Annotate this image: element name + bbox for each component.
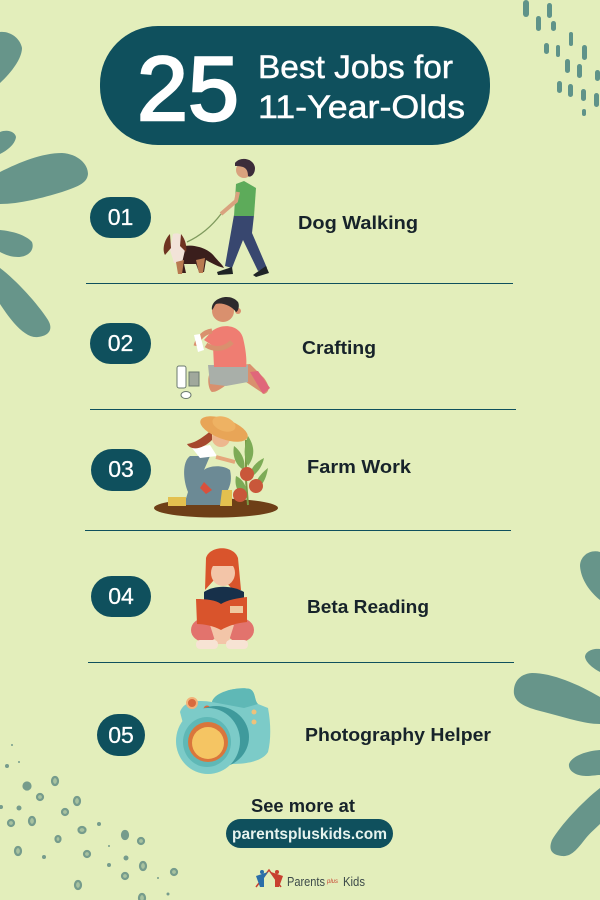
small dots: bottom left xyxy=(0,744,170,896)
icon: camera xyxy=(176,688,270,774)
title banner: 25 xyxy=(137,39,239,140)
item 03 xyxy=(91,411,412,518)
see more callout xyxy=(226,796,393,848)
number badge 05: 05 xyxy=(108,722,134,748)
website pill xyxy=(226,819,393,848)
number badge 03: 03 xyxy=(108,456,134,482)
dots: bottom left xyxy=(8,777,177,900)
label: Farm Work xyxy=(307,457,412,477)
label: Photography Helper xyxy=(305,725,491,745)
logo: Parents Plus Kids xyxy=(256,870,365,889)
item 04 xyxy=(91,548,429,649)
website pill: parentspluskids.com xyxy=(232,826,387,843)
leaves: top left xyxy=(0,32,88,337)
item 05 xyxy=(97,688,491,774)
leaves: bottom right xyxy=(514,551,600,856)
number badge 01 xyxy=(90,197,151,238)
number badge 04 xyxy=(91,576,151,617)
number badge 03 xyxy=(91,449,151,491)
item 02 xyxy=(90,297,376,398)
title banner: 11-Year-Olds xyxy=(258,89,465,125)
icon: girl reading xyxy=(191,548,254,649)
title banner xyxy=(100,26,490,145)
icon: child crafting xyxy=(177,297,270,398)
icon: farmer with plants xyxy=(154,411,278,518)
divider 3 xyxy=(85,530,511,532)
item 01 xyxy=(90,159,418,277)
dashes: top right xyxy=(523,0,600,116)
number badge 02 xyxy=(90,323,151,364)
see more callout: See more at xyxy=(251,796,355,816)
logo: Parents Plus Kids: Kids xyxy=(343,875,365,889)
divider 2 xyxy=(90,408,516,410)
number badge 05 xyxy=(97,714,145,756)
number badge 01: 01 xyxy=(108,204,133,230)
number badge 04: 04 xyxy=(108,583,134,609)
title banner: Best Jobs for xyxy=(258,49,453,85)
divider 4 xyxy=(88,662,514,664)
icon: boy walking dog xyxy=(164,159,269,277)
label: Dog Walking xyxy=(298,213,418,233)
number badge 02: 02 xyxy=(108,330,133,356)
divider 1 xyxy=(86,282,513,284)
logo: Parents Plus Kids: plus xyxy=(326,879,338,885)
label: Crafting xyxy=(302,338,376,358)
label: Beta Reading xyxy=(307,597,429,617)
logo: Parents Plus Kids: Parents xyxy=(287,875,325,889)
